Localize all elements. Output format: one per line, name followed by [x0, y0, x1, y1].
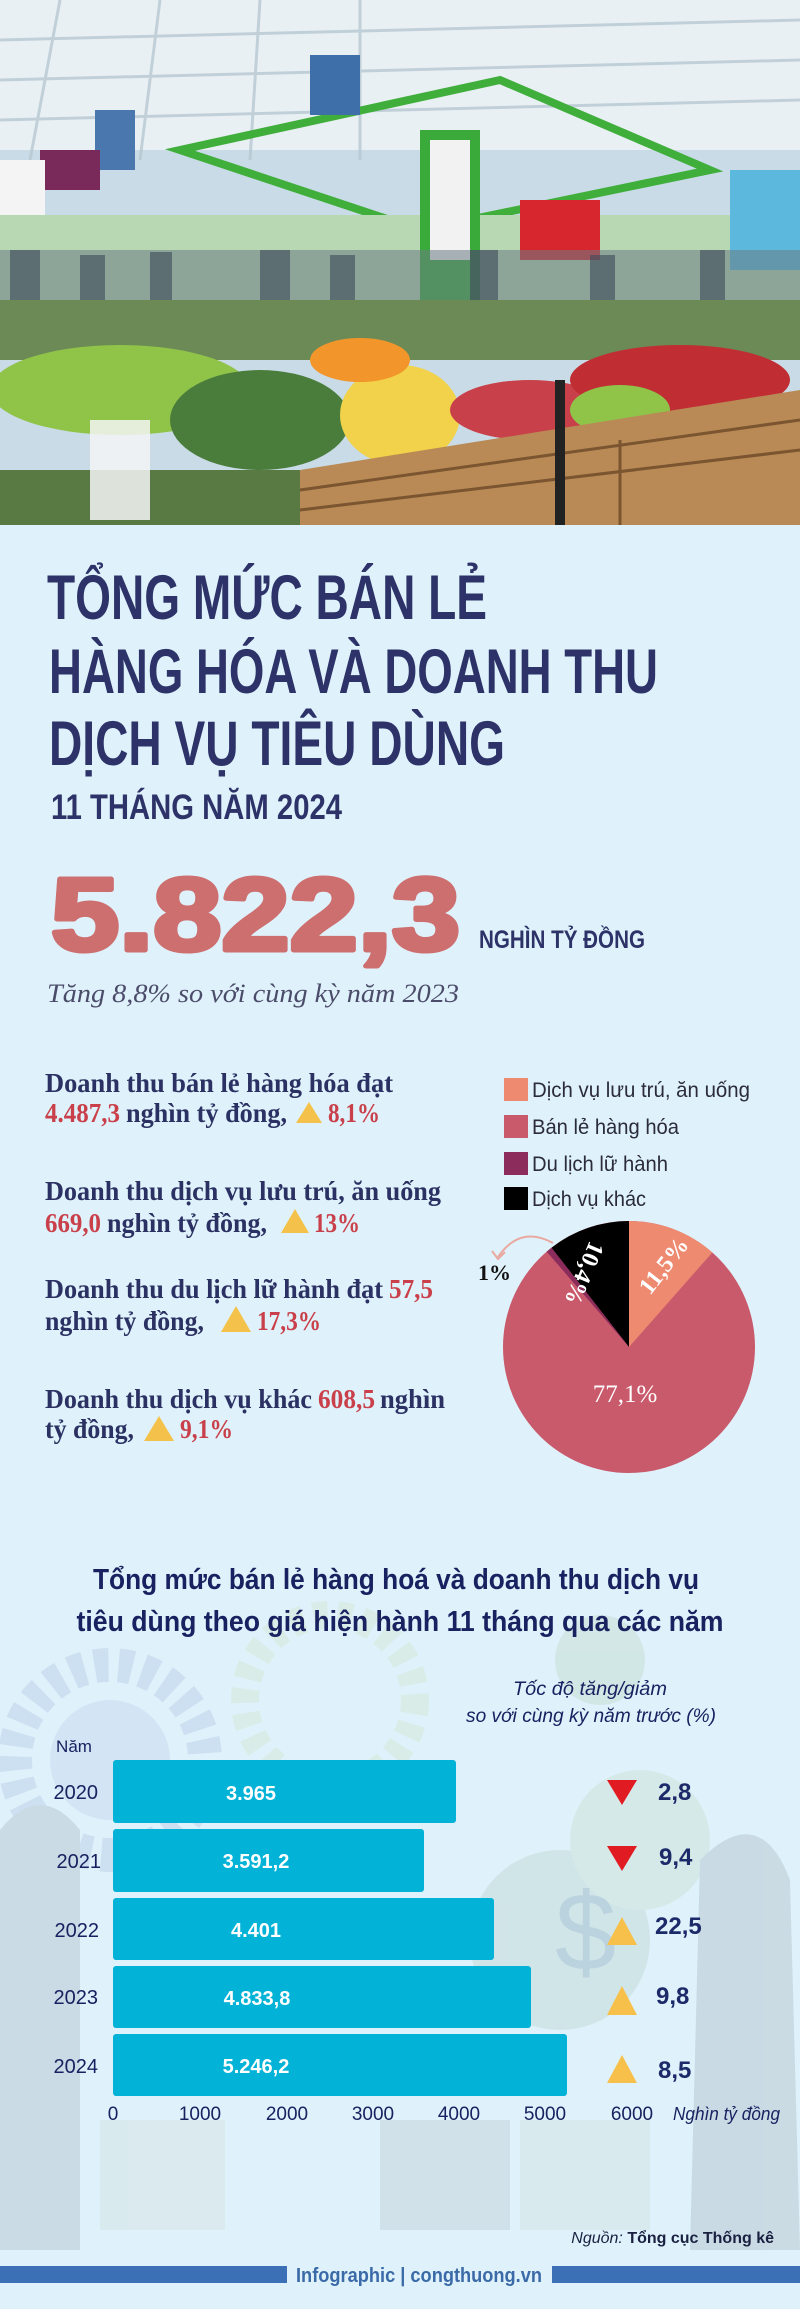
pie chart: 10,4% [559, 1238, 608, 1309]
legend [504, 1078, 750, 1211]
bar chart: 2022 [54, 1920, 99, 1942]
bar chart: 3.965 [226, 1783, 276, 1805]
growth indicators: 9,4 [659, 1844, 693, 1871]
growth note: Tăng 8,8% so với cùng kỳ năm 2023 [47, 979, 459, 1008]
source: Nguồn: Tổng cục Thống kê [571, 2229, 774, 2247]
bar chart: 4.401 [231, 1920, 281, 1942]
growth rate header [466, 1679, 716, 1727]
pie chart [478, 1221, 755, 1473]
growth indicators: 9,8 [656, 1983, 689, 2010]
pie chart: 11,5% [634, 1233, 695, 1300]
growth rate header: so với cùng kỳ năm trước (%) [466, 1706, 716, 1727]
footer [0, 2265, 800, 2287]
bar chart: 3000 [352, 2104, 394, 2125]
bar chart: 2020 [54, 1782, 98, 1804]
bar chart: 0 [108, 2104, 118, 2125]
bar chart: 2021 [56, 1851, 101, 1873]
title: DỊCH VỤ TIÊU DÙNG [49, 708, 505, 779]
text block: travel [45, 1274, 433, 1336]
text block: accommodation: 669,0 [45, 1208, 101, 1238]
text block: retail [45, 1068, 393, 1128]
text block: accommodation: Doanh thu dịch vụ lưu trú, ăn uống [45, 1176, 441, 1206]
legend: Du lịch lữ hành [532, 1153, 668, 1176]
chart title: Tổng mức bán lẻ hàng hoá và doanh thu dịch vụ [93, 1564, 699, 1596]
bar chart: 2023 [54, 1987, 98, 2009]
pie chart: 77,1% [593, 1381, 657, 1408]
text block: retail: Doanh thu bán lẻ hàng hóa đạt [45, 1068, 393, 1098]
text block: accommodation: nghìn tỷ đồng, [107, 1208, 267, 1238]
headline number: 5.822,3 [51, 857, 460, 972]
growth indicators: 22,5 [655, 1913, 702, 1940]
text block: retail: 4.487,3 [45, 1098, 120, 1128]
pie chart: 1% [478, 1260, 511, 1285]
bar chart: 5000 [524, 2104, 566, 2125]
bar chart: 2024 [54, 2056, 98, 2078]
bar chart: 1000 [179, 2104, 221, 2125]
growth indicators [607, 1779, 702, 2084]
legend: Dịch vụ lưu trú, ăn uống [532, 1079, 750, 1102]
text block: other services: Doanh thu dịch vụ khác [45, 1384, 312, 1414]
growth indicators: 2,8 [658, 1779, 691, 1806]
bar chart: Năm [56, 1737, 92, 1756]
bar chart: Nghìn tỷ đồng [673, 2104, 780, 2124]
chart title: tiêu dùng theo giá hiện hành 11 tháng qua các năm [76, 1606, 724, 1638]
text block: other services: tỷ đồng, [45, 1414, 134, 1444]
text block: other services [45, 1384, 445, 1444]
bar chart [54, 1737, 780, 2125]
bar chart: 2000 [266, 2104, 308, 2125]
text block: other services: nghìn [380, 1384, 445, 1414]
bar chart: 6000 [611, 2104, 653, 2125]
text block: accommodation: 13% [314, 1208, 360, 1238]
title [47, 562, 658, 779]
bar chart: 4.833,8 [224, 1988, 290, 2010]
growth rate header: Tốc độ tăng/giảm [513, 1679, 667, 1700]
text block: travel: nghìn tỷ đồng, [45, 1306, 204, 1336]
bar chart: 5.246,2 [223, 2056, 289, 2078]
text block: other services: 9,1% [180, 1414, 233, 1444]
headline number [51, 857, 645, 972]
chart title [76, 1564, 724, 1638]
text block: retail: nghìn tỷ đồng, [126, 1098, 287, 1128]
text block: travel: Doanh thu du lịch lữ hành đạt [45, 1274, 383, 1304]
background illustration [0, 1615, 800, 2250]
footer: Infographic | congthuong.vn [296, 2265, 542, 2287]
text block: travel: 17,3% [257, 1306, 321, 1336]
headline number: NGHÌN TỶ ĐỒNG [479, 924, 645, 954]
text block: travel: 57,5 [389, 1274, 433, 1304]
text block: accommodation [45, 1176, 441, 1238]
title: TỔNG MỨC BÁN LẺ [47, 562, 487, 633]
bar chart: 3.591,2 [223, 1851, 289, 1873]
photo: supermarket [0, 0, 800, 525]
subtitle: period: 11 THÁNG NĂM 2024 [51, 787, 342, 827]
legend: Bán lẻ hàng hóa [532, 1116, 679, 1139]
background illustration: $ [555, 1871, 616, 1994]
legend: Dịch vụ khác [532, 1188, 646, 1211]
growth indicators: 8,5 [658, 2057, 691, 2084]
bar chart: 4000 [438, 2104, 480, 2125]
text block: retail: 8,1% [328, 1098, 380, 1128]
text block: other services: 608,5 [318, 1384, 375, 1414]
